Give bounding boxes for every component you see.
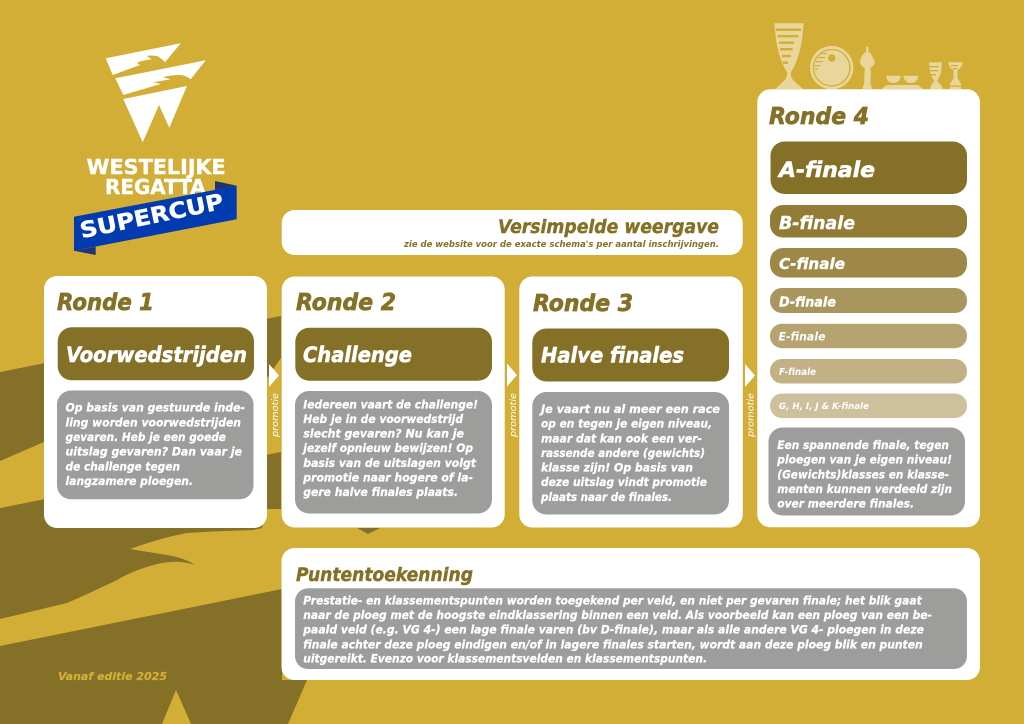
icon: finial trophy: [860, 47, 875, 89]
icon: bowls: [882, 76, 923, 89]
label box: voorwedstrijden: [58, 327, 254, 380]
icon: trophies: [774, 23, 963, 89]
label box: voorwedstrijden: Voorwedstrijden: [66, 343, 247, 367]
label box: challenge: [295, 328, 492, 381]
label box: f-finale: [770, 359, 967, 384]
icon: logo mark: [106, 43, 206, 142]
arrow: promotie 3: promotie: [746, 393, 756, 438]
background: enlarged dark logo shape: [0, 316, 380, 724]
text block: ronde 1: gevaren. Heb je een goede: [66, 431, 226, 444]
label box: a-finale: [770, 142, 967, 194]
text block: ronde 1: ling worden voorwedstrijden: [66, 416, 241, 429]
text block: ronde 1: Op basis van gestuurde inde-: [66, 402, 245, 415]
label box: b-finale: [770, 205, 967, 238]
text block: ronde 3: rassende andere (gewichts): [541, 447, 705, 460]
logo text: Supercup: SUPERCUP: [78, 190, 226, 244]
label box: c-finale: C-finale: [779, 255, 845, 273]
text block: ronde 3: maar dat kan ook een ver-: [541, 432, 702, 445]
heading: ronde 4: Ronde 4: [769, 104, 869, 130]
panel: ronde 1: [44, 276, 267, 528]
label box: f-finale: F-finale: [779, 367, 817, 378]
text block: ronde 2: promotie naar hogere of la-: [302, 471, 473, 484]
label box: b-finale: B-finale: [779, 213, 855, 234]
label box: e-finale: [770, 324, 967, 348]
text block: ronde 3: deze uitslag vindt promotie: [541, 476, 707, 489]
label box: g-k-finale: G, H, I, J & K-finale: [779, 402, 869, 412]
text block: puntentoekenning: [295, 588, 967, 669]
text block: ronde 4: over meerdere finales.: [777, 498, 914, 511]
text block: puntentoekenning: uitgereikt. Evenzo voor klassementsvelden en klassementspunten.: [303, 653, 707, 666]
text block: ronde 4: menten kunnen verdeeld zijn: [777, 483, 952, 496]
icon: small cup: [929, 62, 943, 89]
text block: ronde 1: langzamere ploegen.: [66, 475, 193, 488]
arrow: promotie 1: [269, 364, 281, 438]
text block: puntentoekenning: naar de ploeg met de hoogste eindklassering binnen een veld. Als voorbeeld kan een ploeg van een be-: [303, 609, 932, 622]
text block: ronde 3: Je vaart nu al meer een race: [539, 403, 720, 416]
text block: ronde 2: slecht gevaren? Nu kan je: [303, 428, 464, 441]
label box: challenge: Challenge: [303, 343, 412, 367]
icon: small trophy: [948, 62, 963, 89]
arrow: promotie 3: [745, 364, 756, 438]
text block: puntentoekenning: Prestatie- en klassementspunten worden toegekend per veld, en niet per gevaren finale; het blik gaat: [303, 594, 922, 607]
panel: ronde 4: [757, 89, 980, 527]
text block: ronde 3: op en tegen je eigen niveau,: [541, 418, 712, 431]
arrow: promotie 1: promotie: [271, 393, 281, 438]
panel: puntentoekenning: [282, 548, 980, 680]
logo: Westelijke Regatta Supercup: [74, 43, 237, 255]
text block: puntentoekenning: finale achter deze ploeg eindigen en/of in lagere finales starten, wordt aan deze ploeg blik en punten: [303, 638, 923, 651]
text block: ronde 2: Heb je in de voorwedstrijd: [303, 413, 464, 426]
logo ribbon: [74, 181, 237, 255]
text block: ronde 2: jezelf opnieuw bewijzen! Op: [301, 442, 473, 455]
label box: c-finale: [770, 248, 967, 278]
text block: ronde 4: Een spannende finale, tegen: [777, 439, 949, 452]
arrow: promotie 2: promotie: [509, 393, 519, 438]
text block: ronde 4: [768, 428, 965, 516]
label box: e-finale: E-finale: [778, 330, 826, 344]
panel: ronde 3: [519, 276, 743, 528]
text block: ronde 3: klasse zijn! Op basis van: [541, 462, 693, 475]
text block: ronde 2: Iedereen vaart de challenge!: [303, 398, 478, 411]
arrow: promotie 2: [507, 364, 519, 438]
label box: halve finales: Halve finales: [541, 344, 684, 368]
text block: ronde 2: basis van de uitslagen volgt: [303, 457, 477, 470]
label box: d-finale: [770, 288, 967, 313]
text block: ronde 2: gere halve finales plaats.: [303, 486, 458, 499]
heading: ronde 2: Ronde 2: [296, 290, 396, 316]
text block: ronde 4: (Gewichts)klasses en klasse-: [777, 468, 949, 481]
text block: ronde 1: [57, 390, 254, 499]
note: website: zie de website voor de exacte schema's per aantal inschrijvingen.: [403, 240, 719, 250]
logo text: Westelijke: WESTELIJKE: [87, 155, 226, 179]
text block: ronde 1: uitslag gevaren? Dan vaar je: [66, 446, 242, 459]
text block: ronde 2: [295, 391, 492, 514]
icon: big cup: [774, 23, 804, 89]
panel: versimpelde weergave: [282, 210, 743, 255]
panel: ronde 2: [282, 276, 505, 528]
text block: ronde 1: de challenge tegen: [66, 460, 180, 473]
label box: a-finale: A-finale: [777, 158, 875, 182]
footer note: vanaf editie 2025: Vanaf editie 2025: [58, 670, 167, 683]
text block: ronde 3: plaats naar de finales.: [540, 491, 672, 504]
text block: ronde 3: [532, 392, 729, 514]
heading: ronde 1: Ronde 1: [57, 290, 154, 316]
text block: puntentoekenning: paald veld (e.g. VG 4-) een lage finale varen (bv D-finale), maar als alle andere VG 4- ploegen in deze: [302, 624, 924, 637]
text block: ronde 4: ploegen van je eigen niveau!: [776, 454, 952, 467]
heading: versimpelde weergave: Versimpelde weergave: [498, 216, 719, 238]
heading: puntentoekenning: Puntentoekenning: [296, 564, 473, 586]
label box: g-k-finale: [770, 394, 967, 418]
logo text: Regatta: REGATTA: [105, 175, 206, 199]
label box: d-finale: D-finale: [779, 295, 836, 311]
label box: halve finales: [532, 328, 729, 382]
heading: ronde 3: Ronde 3: [533, 291, 633, 317]
icon: plate: [810, 46, 853, 89]
